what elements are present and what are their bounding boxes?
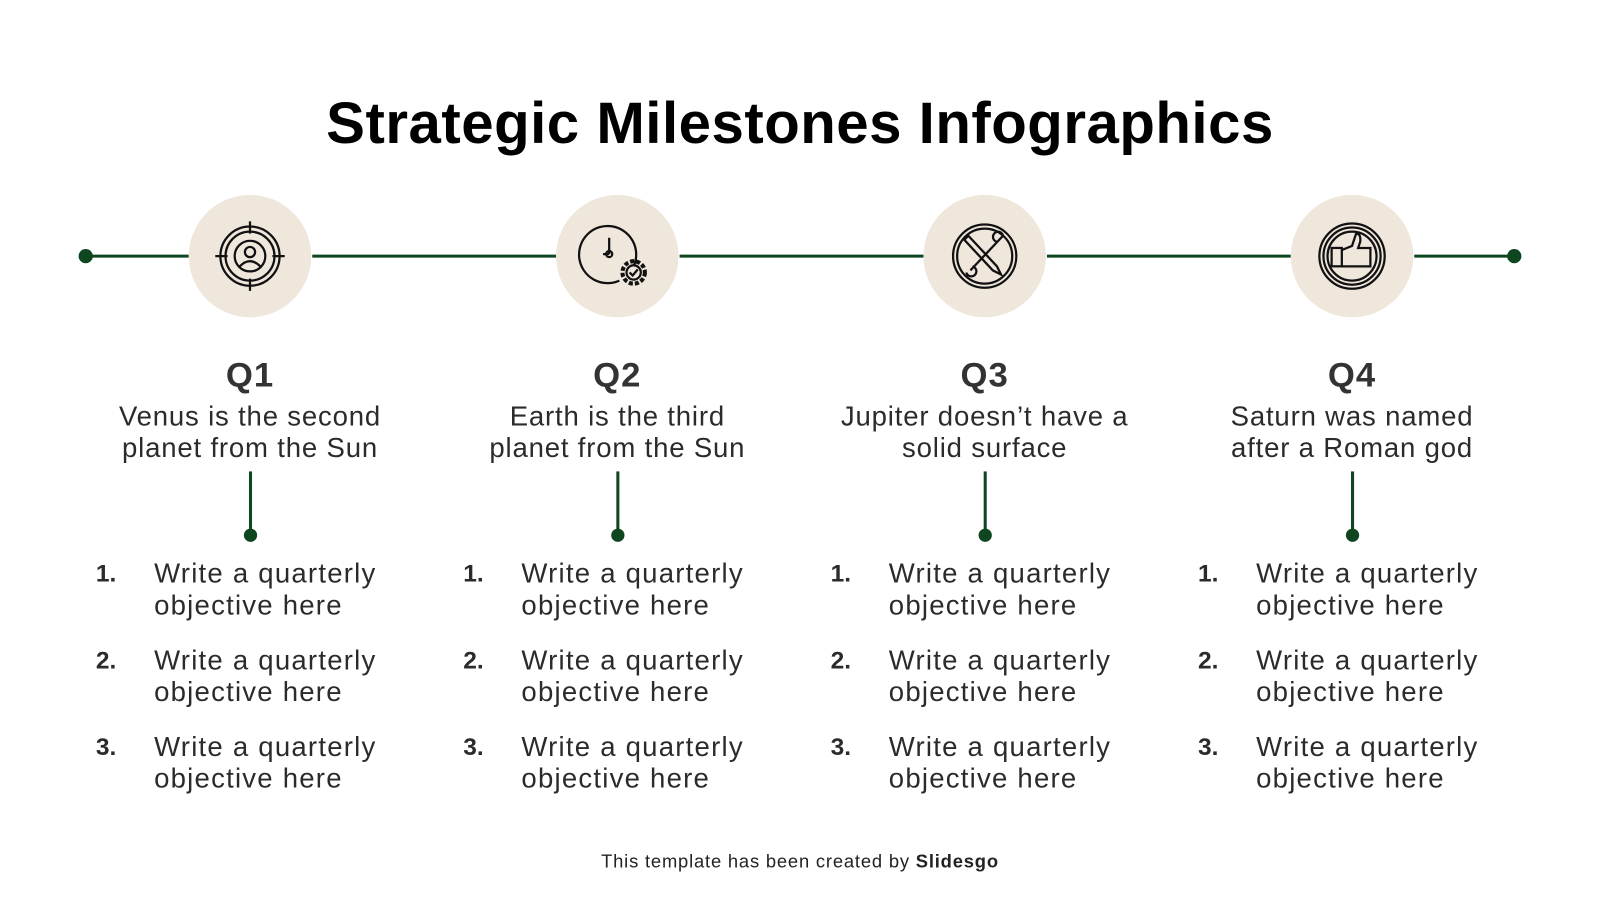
text: planet from the Sun [122,433,378,463]
text: Q1 [226,356,274,395]
title: Strategic Milestones Infographics [326,91,1274,156]
text: objective here [889,590,1077,620]
text: 3. [831,734,851,761]
text: Q3 [961,356,1009,395]
text: 2. [831,647,851,674]
text: 1. [96,560,116,588]
footer: This template has been created by Slidesgo [601,851,999,871]
text: objective here [154,590,343,620]
text: 2. [1198,647,1218,674]
text: Write a quarterly [154,645,377,676]
text: objective here [1256,677,1445,707]
text: Write a quarterly [521,558,744,589]
text: Write a quarterly [521,645,744,676]
icon circle: Q2 clock gear [556,195,679,317]
text: Jupiter doesn’t have a [841,401,1128,432]
text: Saturn was named [1231,401,1473,432]
text: objective here [1256,590,1445,620]
text: objective here [154,677,343,707]
text: objective here [154,763,343,794]
column: Q3 [78,198,1522,794]
text: 3. [96,734,116,761]
text: after a Roman god [1231,433,1473,463]
text: Write a quarterly [154,558,377,589]
timeline line [78,249,1522,264]
text: planet from the Sun [489,433,745,463]
text: 3. [1198,734,1218,761]
text: 1. [831,560,851,588]
column: Q4 [78,198,1522,794]
text: 1. [463,560,484,588]
text: Q4 [1328,356,1376,395]
text: Write a quarterly [1256,558,1479,589]
text: 2. [463,647,484,674]
text: Q2 [593,356,641,395]
text: Write a quarterly [889,645,1111,676]
icon circle: Q4 thumbs up [1291,195,1413,317]
text: Venus is the second [119,401,381,432]
text: Write a quarterly [521,732,744,762]
text: 3. [463,734,484,761]
text: objective here [521,590,710,620]
icon circle: Q3 tools [923,195,1046,317]
text: Write a quarterly [1256,645,1479,676]
column: Q1 [78,198,1522,794]
text: objective here [889,763,1077,794]
text: Write a quarterly [154,732,377,762]
text: objective here [1256,763,1445,794]
text: 2. [96,647,116,674]
text: solid surface [902,433,1067,463]
text: Write a quarterly [889,558,1111,589]
text: Write a quarterly [889,732,1111,762]
text: 1. [1198,560,1218,588]
text: objective here [889,677,1077,707]
text: objective here [521,763,710,794]
text: objective here [521,677,710,707]
text: Write a quarterly [1256,732,1479,762]
column: Q2 [78,198,1522,794]
text: Earth is the third [510,401,725,432]
icon circle: Q1 target [189,195,311,317]
